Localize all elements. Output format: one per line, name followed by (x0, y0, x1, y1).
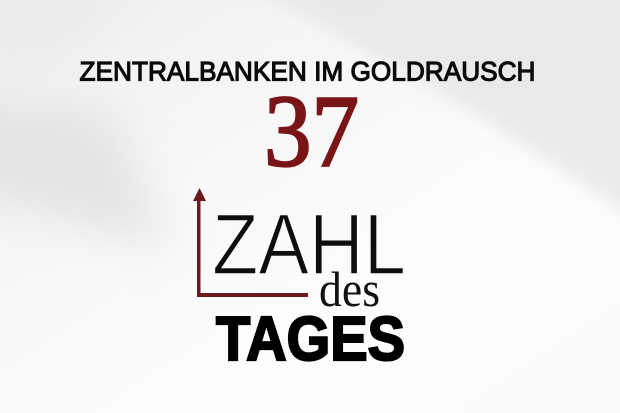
logo word TAGES: TAGES (216, 305, 405, 374)
logo: Zahl des Tages (193, 188, 406, 374)
big number 37: 37 (264, 74, 359, 188)
icon: red axis arrow (193, 188, 308, 297)
title: ZENTRALBANKEN IM GOLDRAUSCH (80, 56, 536, 86)
logo word des: des (319, 261, 380, 317)
logo word ZAHL: ZAHL (212, 197, 406, 293)
